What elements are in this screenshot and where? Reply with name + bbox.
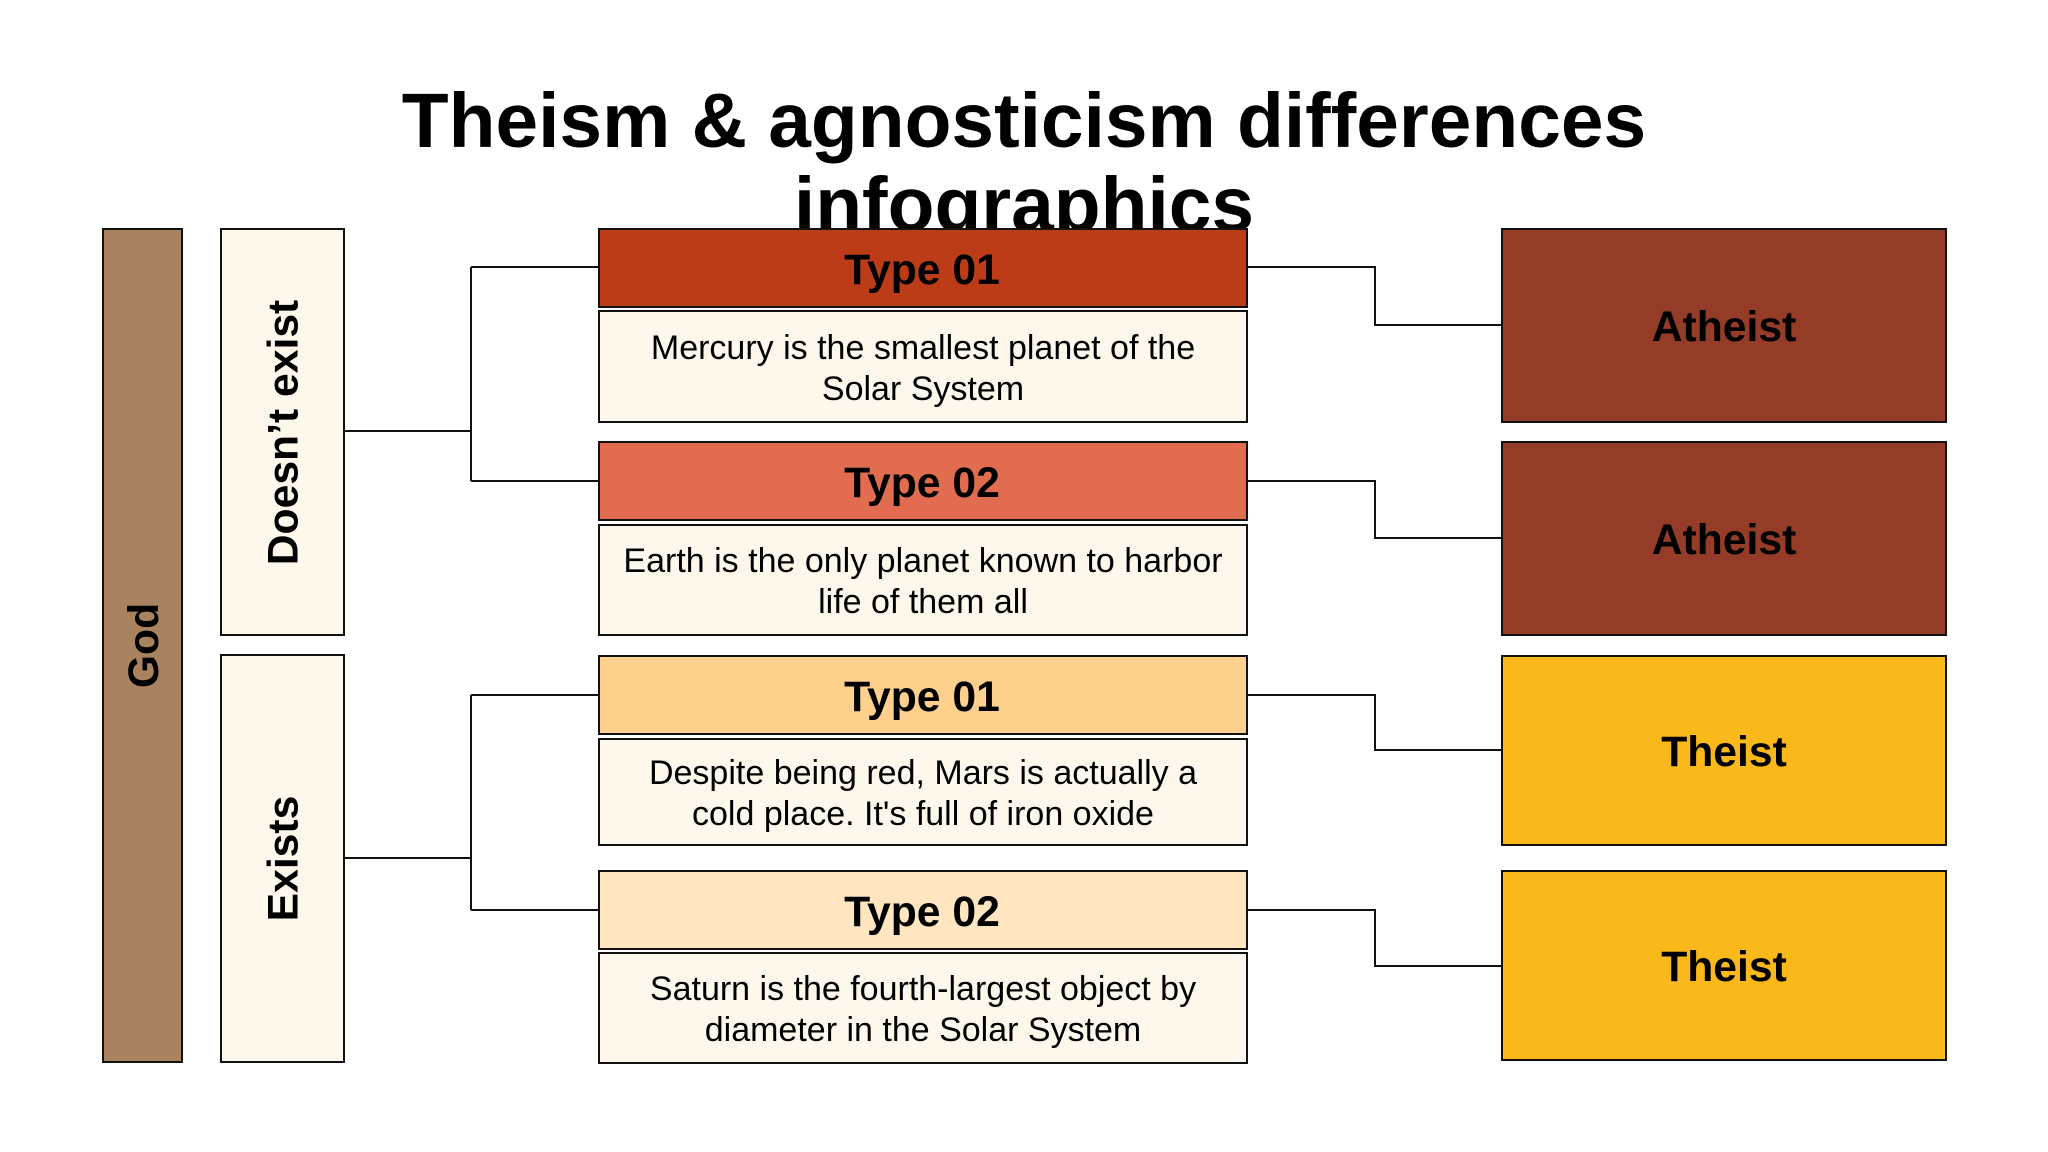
description: Mercury	[598, 310, 1248, 423]
description: Mercury: Solar System	[822, 370, 1024, 408]
title: Theism & agnosticism differences	[402, 79, 1646, 164]
description: Saturn	[598, 952, 1248, 1064]
type 01 header, red	[598, 228, 1248, 308]
result: Atheist 1: Atheist	[1652, 303, 1796, 351]
panel: God: God	[120, 603, 168, 688]
title	[402, 79, 1646, 248]
description: Earth	[598, 524, 1248, 636]
type 02 header, coral	[598, 441, 1248, 521]
type 02 header, pale orange	[598, 870, 1248, 950]
result: Theist 1: Theist	[1661, 728, 1787, 776]
description: Mercury: Mercury is the smallest planet of the	[651, 328, 1195, 366]
description: Mars	[598, 738, 1248, 846]
description: Saturn: Saturn is the fourth-largest object by	[650, 970, 1196, 1008]
result: Theist 1	[1501, 655, 1947, 846]
result: Atheist 1	[1501, 228, 1947, 423]
panel: Exists: Exists	[260, 796, 308, 921]
description: Mars: cold place. It's full of iron oxide	[692, 795, 1154, 833]
type 01 header, orange	[598, 655, 1248, 735]
panel: God	[102, 228, 183, 1063]
panel: Exists	[220, 654, 345, 1063]
description: Saturn: diameter in the Solar System	[705, 1011, 1141, 1049]
panel: Doesn't exist	[220, 228, 345, 636]
type 02 header, coral: Type 02	[844, 458, 1000, 506]
panel: Doesn't exist: Doesn’t exist	[260, 299, 308, 565]
title: infographics	[794, 163, 1254, 248]
result: Atheist 2	[1501, 441, 1947, 636]
type 01 header, red: Type 01	[844, 246, 1000, 294]
type 01 header, orange: Type 01	[844, 672, 1000, 720]
description: Mars: Despite being red, Mars is actually a	[649, 754, 1197, 792]
type 02 header, pale orange: Type 02	[844, 888, 1000, 936]
result: Theist 2	[1501, 870, 1947, 1061]
description: Earth: life of them all	[818, 583, 1028, 621]
result: Atheist 2: Atheist	[1652, 516, 1796, 564]
description: Earth: Earth is the only planet known to harbor	[623, 542, 1223, 580]
result: Theist 2: Theist	[1661, 943, 1787, 991]
